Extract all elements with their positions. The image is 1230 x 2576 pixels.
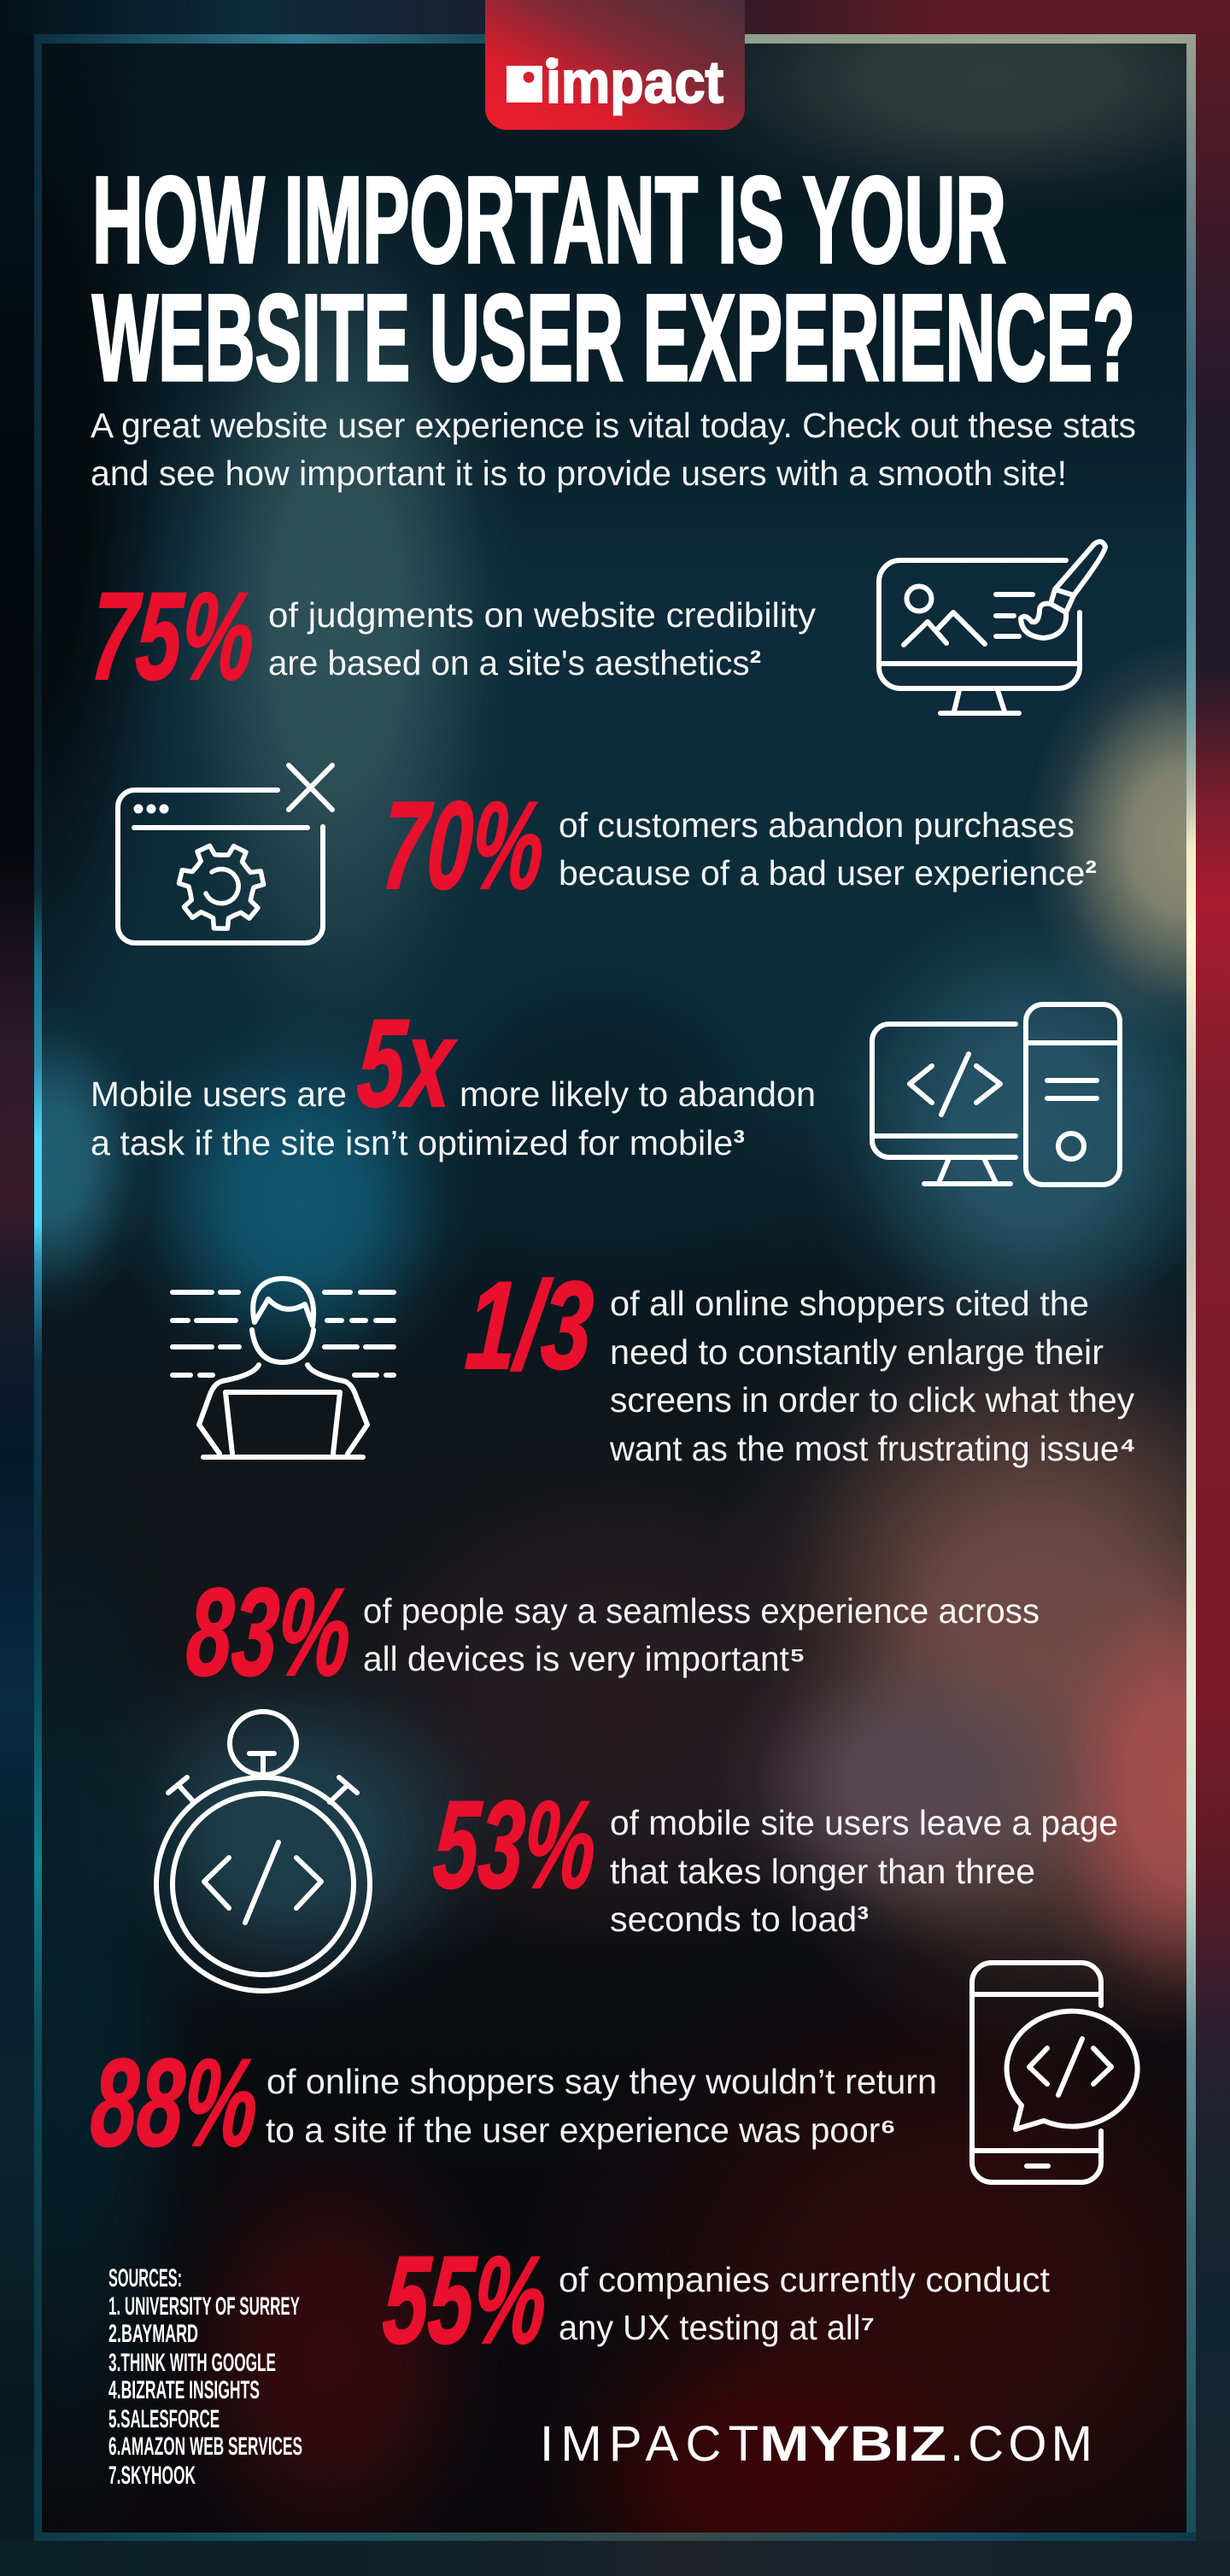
- stat: 75%: are based on a site's aesthetics²: [268, 643, 761, 682]
- stat: 5x: a task if the site isn’t optimized for mobile³: [91, 1123, 745, 1162]
- stat: 83%: [183, 1562, 1040, 1701]
- stat: 70%: because of a bad user experience²: [559, 853, 1097, 893]
- stat: 1/3: [462, 1256, 1136, 1468]
- stat: 83%: all devices is very important⁵: [363, 1639, 805, 1678]
- stat: 5x: Mobile users are: [91, 1074, 347, 1114]
- stat: 5x: more likely to abandon: [460, 1074, 816, 1114]
- icon: stopwatch with code: [156, 1712, 370, 1991]
- stat: 75%: of judgments on website credibility: [268, 595, 817, 635]
- stat: 1/3: 1/3: [462, 1256, 597, 1395]
- sources list: 4.BIZRATE INSIGHTS: [108, 2376, 260, 2404]
- stat: 5x: 5x: [354, 993, 460, 1133]
- stat: 1/3: need to constantly enlarge their: [610, 1332, 1104, 1372]
- stat: 70%: 70%: [378, 776, 548, 915]
- sources list: 6.AMAZON WEB SERVICES: [108, 2433, 302, 2461]
- stat: 55%: of companies currently conduct: [559, 2260, 1051, 2299]
- logo tab: impact: [546, 49, 723, 115]
- intro text: and see how important it is to provide users with a smooth site!: [91, 454, 1067, 493]
- stat: 88%: 88%: [87, 2033, 262, 2172]
- stat: 53%: [430, 1775, 1118, 1939]
- stat: 53%: 53%: [430, 1775, 600, 1914]
- stat: 53%: of mobile site users leave a page: [610, 1803, 1118, 1842]
- icon: browser window with gear: [118, 765, 332, 943]
- sources list: 1. UNIVERSITY OF SURREY: [108, 2292, 300, 2321]
- icon: monitor with paintbrush: [879, 542, 1105, 713]
- sources list: 5.SALESFORCE: [108, 2405, 220, 2433]
- icon: person at laptop: [173, 1279, 394, 1457]
- icon: logo square: [507, 66, 542, 102]
- website url: .COM: [950, 2416, 1092, 2472]
- stat: 1/3: of all online shoppers cited the: [610, 1284, 1089, 1323]
- stat: 53%: seconds to load³: [610, 1900, 869, 1939]
- stat: 83%: 83%: [183, 1562, 355, 1701]
- website url: MYBIZ: [759, 2416, 946, 2472]
- stat: 1/3: want as the most frustrating issue⁴: [609, 1429, 1136, 1468]
- stat: 75%: [87, 566, 817, 705]
- stat: 75%: 75%: [87, 566, 259, 705]
- title: [92, 151, 1135, 407]
- sources list: 3.THINK WITH GOOGLE: [108, 2349, 276, 2377]
- icon: desktop computer with code: [872, 1004, 1120, 1185]
- stat: 5x: [91, 993, 816, 1162]
- sources list: SOURCES:: [108, 2264, 182, 2292]
- stat: 53%: that takes longer than three: [610, 1852, 1035, 1891]
- stat: 1/3: screens in order to click what they: [610, 1380, 1134, 1420]
- intro text: [91, 406, 1136, 493]
- website url: [540, 2416, 1092, 2472]
- sources list: 2.BAYMARD: [108, 2320, 198, 2348]
- stat: 55%: 55%: [379, 2230, 551, 2369]
- intro text: A great website user experience is vital today. Check out these stats: [91, 406, 1136, 445]
- stat: 88%: [87, 2033, 937, 2172]
- website url: IMPACT: [540, 2416, 758, 2472]
- logo tab: [485, 0, 745, 130]
- stat: 83%: of people say a seamless experience across: [363, 1591, 1040, 1630]
- sources list: [108, 2264, 302, 2490]
- stat: 70%: of customers abandon purchases: [559, 805, 1075, 845]
- stat: 55%: any UX testing at all⁷: [559, 2308, 875, 2347]
- icon: smartphone with code bubble: [972, 1963, 1138, 2182]
- stat: 55%: [379, 2230, 1051, 2369]
- stat: 88%: of online shoppers say they wouldn’t return: [266, 2062, 937, 2101]
- sources list: 7.SKYHOOK: [108, 2462, 196, 2490]
- stat: 70%: [378, 776, 1097, 915]
- stat: 88%: to a site if the user experience was poor⁶: [266, 2111, 896, 2150]
